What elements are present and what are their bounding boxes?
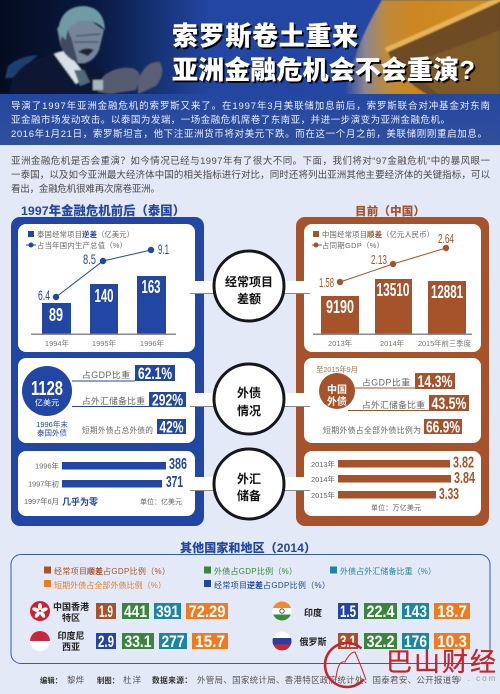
row: Russia: 俄罗斯 bbox=[299, 636, 327, 647]
x axis labels bbox=[328, 338, 472, 348]
circle: forex reserves bbox=[214, 449, 284, 519]
row: Indonesia: 15.7 bbox=[195, 632, 225, 651]
row: India: 印度 bbox=[304, 607, 322, 618]
legend: （亿美元） bbox=[97, 230, 134, 239]
China forex reserves: 3.84 bbox=[454, 470, 475, 487]
China forex reserves bbox=[311, 454, 475, 512]
row: Russia bbox=[272, 631, 470, 652]
chart: China current account surplus bbox=[312, 230, 472, 348]
title bbox=[172, 21, 475, 85]
China forex reserves: 3.33 bbox=[439, 486, 459, 503]
China foreign debt: 占外汇储备比重 bbox=[362, 399, 425, 410]
legend: （亿元人民币） bbox=[382, 230, 434, 239]
footer credits: 制图： bbox=[97, 676, 119, 685]
legend: 泰国经常项目 bbox=[37, 230, 82, 239]
Thailand forex reserves: 单位：亿美元 bbox=[140, 497, 182, 506]
line: 8.5 bbox=[83, 251, 96, 267]
intro band: 亚金融市场发动攻击。以泰国为发端，一场金融危机席卷了东南亚，并进一步演变为亚洲金融危机。 bbox=[11, 114, 450, 126]
bars bbox=[31, 276, 176, 335]
row: Hong Kong: 特区 bbox=[62, 612, 80, 623]
x axis labels: 1995年 bbox=[92, 338, 117, 348]
x axis labels: 1996年 bbox=[140, 338, 165, 348]
flag: Hong Kong bbox=[30, 601, 50, 621]
x axis labels: 2013年 bbox=[328, 338, 353, 348]
Thailand forex reserves: 1996年 bbox=[35, 460, 60, 470]
debt circle: 外债 bbox=[327, 395, 347, 408]
row: Indonesia: 2.9 bbox=[98, 632, 114, 651]
row: Indonesia: 277 bbox=[162, 632, 184, 651]
bars: 13510 bbox=[376, 280, 410, 300]
watermark logo bbox=[316, 634, 378, 694]
China foreign debt: 至2015年9月 bbox=[316, 364, 358, 374]
China foreign debt bbox=[316, 364, 469, 436]
connector bands bbox=[190, 281, 310, 491]
footer credits: 编辑： bbox=[40, 676, 62, 685]
circle: current account: 差额 bbox=[237, 291, 261, 306]
circle: foreign debt: 情况 bbox=[237, 403, 261, 418]
Thailand forex reserves: 386 bbox=[169, 456, 187, 473]
legend: 占GDP比例（%） bbox=[263, 580, 330, 590]
circle: forex reserves: 储备 bbox=[237, 488, 261, 503]
row: Russia: 176 bbox=[404, 632, 427, 651]
row: India: 1.5 bbox=[340, 602, 356, 621]
Thailand foreign debt: 占GDP比重 bbox=[82, 369, 130, 380]
bars bbox=[313, 279, 472, 335]
line: 6.4 bbox=[38, 287, 50, 303]
debt total circle bbox=[22, 366, 72, 416]
row: Indonesia bbox=[30, 630, 228, 652]
chart: Thailand current account deficit bbox=[26, 230, 176, 348]
row: Hong Kong: 391 bbox=[156, 602, 179, 621]
body paragraph: 一泰国，以及如今亚洲最大经济体中国的相关指标进行对比，同时还将列出亚洲其他主要经济体的关键指标，可以 bbox=[11, 169, 490, 181]
panel: other economies bbox=[11, 554, 490, 664]
body paragraph bbox=[11, 155, 490, 195]
x axis labels bbox=[45, 338, 165, 348]
row: Hong Kong: 1.9 bbox=[99, 602, 113, 621]
title: 索罗斯卷土重来 bbox=[172, 21, 358, 51]
legend: 经常项目 bbox=[54, 566, 87, 576]
Thailand foreign debt: 62.1% bbox=[138, 364, 172, 383]
row: Russia: 32.2 bbox=[366, 632, 394, 651]
legend: 中国经常项目 bbox=[322, 230, 367, 239]
intro band: 导演了1997年亚洲金融危机的索罗斯又来了。在1997年3月美联储加息前后，索罗斯联合对冲基金对东南 bbox=[11, 100, 490, 112]
watermark bbox=[316, 634, 497, 694]
Thailand foreign debt: 泰国外债 bbox=[37, 428, 67, 438]
body paragraph: 亚洲金融危机是否会重演？如今情况已经与1997年有了很大不同。下面，我们将对“97金融危机”中的暴风眼一 bbox=[11, 155, 490, 167]
panel: China now bbox=[296, 217, 489, 526]
legend: 逆差 bbox=[247, 580, 263, 590]
bars: 9190 bbox=[326, 297, 354, 317]
row: Indonesia: 西亚 bbox=[62, 642, 80, 652]
China foreign debt: 短期外债占全部外债比例为 bbox=[323, 425, 421, 435]
line: 1.58 bbox=[319, 275, 334, 290]
Thailand forex reserves bbox=[24, 456, 187, 507]
legend: 逆差 bbox=[82, 230, 97, 239]
China forex reserves: 3.82 bbox=[453, 454, 474, 472]
row: Hong Kong: 72.29 bbox=[188, 602, 226, 621]
bars: 140 bbox=[94, 286, 114, 306]
left heading: 1997年金融危机前后（泰国） bbox=[21, 203, 185, 218]
row: Hong Kong: 441 bbox=[124, 602, 147, 621]
Thailand foreign debt: 1996年末 bbox=[36, 419, 68, 429]
intro band: 2016年1月21日，索罗斯坦言，他下注亚洲货币将对美元下跌。而在这一个月之前，美联储刚刚重启加息。 bbox=[11, 128, 487, 140]
line: 2.64 bbox=[438, 231, 454, 246]
image: golden wave bbox=[345, 0, 500, 95]
China foreign debt: 占GDP比重 bbox=[362, 376, 410, 388]
China foreign debt: 43.5% bbox=[432, 394, 466, 413]
legend: 顺差 bbox=[367, 230, 382, 239]
bars: 89 bbox=[49, 305, 63, 325]
title: 亚洲金融危机会不会重演? bbox=[172, 55, 475, 85]
row: Indonesia: 33.1 bbox=[124, 632, 152, 651]
legend bbox=[26, 230, 134, 250]
x axis labels: 2014年 bbox=[380, 338, 405, 348]
intro band bbox=[0, 94, 500, 145]
watermark: p . com bbox=[457, 674, 497, 683]
row: India: 18.7 bbox=[437, 602, 467, 621]
legend bbox=[312, 230, 434, 250]
legend: 短期外债占全部外债比例（%） bbox=[54, 580, 166, 590]
row: Indonesia: 印度尼 bbox=[57, 630, 85, 641]
debt circle: 中国 bbox=[327, 383, 347, 396]
debt total circle: 1128 bbox=[31, 378, 63, 400]
footer credits bbox=[40, 675, 460, 685]
legend: 顺差 bbox=[87, 566, 103, 576]
row: India: 22.4 bbox=[366, 602, 395, 621]
header banner bbox=[0, 0, 500, 95]
Thailand forex reserves: 1997年初 bbox=[28, 478, 59, 488]
China forex reserves: 单位：万亿美元 bbox=[371, 503, 421, 512]
Thailand foreign debt: 短期外债占总外债的 bbox=[82, 425, 153, 435]
Thailand foreign debt: 42% bbox=[160, 418, 184, 436]
row: Russia: 10.3 bbox=[437, 632, 467, 651]
Thailand foreign debt bbox=[22, 364, 186, 438]
flag: Indonesia bbox=[30, 631, 50, 651]
circle: foreign debt: 外债 bbox=[237, 385, 261, 400]
line bbox=[38, 241, 169, 303]
row: Russia: 3.1 bbox=[340, 632, 356, 651]
body paragraph: 看出，金融危机很难再次席卷亚洲。 bbox=[11, 183, 160, 195]
legend: 占当年国内生产总值（%） bbox=[37, 241, 127, 250]
row: Hong Kong: 中国香港 bbox=[53, 601, 89, 612]
watermark: 巴山财经 bbox=[386, 647, 496, 677]
x axis labels: 1994年 bbox=[45, 338, 70, 348]
image: portrait of Soros bbox=[5, 6, 162, 94]
row: India bbox=[272, 601, 470, 622]
line bbox=[319, 231, 454, 290]
China forex reserves: 2014年 bbox=[311, 474, 336, 484]
other economies heading: 其他国家和地区（2014） bbox=[180, 540, 316, 555]
Thailand forex reserves: 几乎为零 bbox=[62, 496, 98, 507]
legend: 外债占外汇储备比重（%） bbox=[340, 566, 436, 576]
line: 2.13 bbox=[371, 252, 387, 267]
China foreign debt: 14.3% bbox=[418, 372, 452, 391]
circle: current account: 经常项目 bbox=[225, 274, 273, 289]
right heading: 目前（中国） bbox=[355, 204, 425, 218]
China forex reserves: 2015年 bbox=[311, 490, 336, 500]
footer credits: 黎烨 bbox=[67, 675, 84, 685]
legend: 占同期GDP（%） bbox=[322, 241, 384, 250]
flag: Russia bbox=[272, 632, 292, 650]
line: 9.1 bbox=[158, 241, 169, 257]
bars: 163 bbox=[142, 277, 160, 297]
debt circle bbox=[319, 373, 355, 409]
x axis labels: 2015年前三季度 bbox=[418, 338, 472, 348]
row: Hong Kong bbox=[30, 601, 228, 623]
flag: India bbox=[272, 602, 292, 620]
legend bbox=[44, 566, 436, 590]
legend: 外债占GDP比例（%） bbox=[214, 566, 297, 576]
circle: forex reserves: 外汇 bbox=[237, 471, 261, 486]
circle: foreign debt bbox=[214, 364, 284, 434]
legend: 占GDP比例（%） bbox=[103, 566, 170, 576]
footer credits: 杜洋 bbox=[123, 675, 141, 685]
debt total circle: 亿美元 bbox=[35, 398, 59, 408]
row: India: 143 bbox=[404, 602, 427, 621]
panel: Thailand 1997 bbox=[11, 217, 204, 526]
footer credits: 外管局、国家统计局、香港特区政府统计处、国泰君安、公开报道等 bbox=[197, 675, 460, 685]
bars: 12881 bbox=[431, 282, 463, 302]
China forex reserves: 2013年 bbox=[311, 459, 336, 469]
circle: current account bbox=[214, 251, 284, 321]
footer credits: 数据来源： bbox=[152, 675, 192, 685]
China foreign debt: 66.9% bbox=[426, 418, 460, 436]
Thailand foreign debt: 占外汇储备比重 bbox=[82, 395, 145, 406]
Thailand forex reserves: 371 bbox=[166, 474, 183, 491]
Thailand forex reserves: 1997年6月 bbox=[24, 496, 59, 506]
legend: 经常项目 bbox=[214, 580, 247, 590]
Thailand foreign debt: 292% bbox=[152, 390, 183, 410]
